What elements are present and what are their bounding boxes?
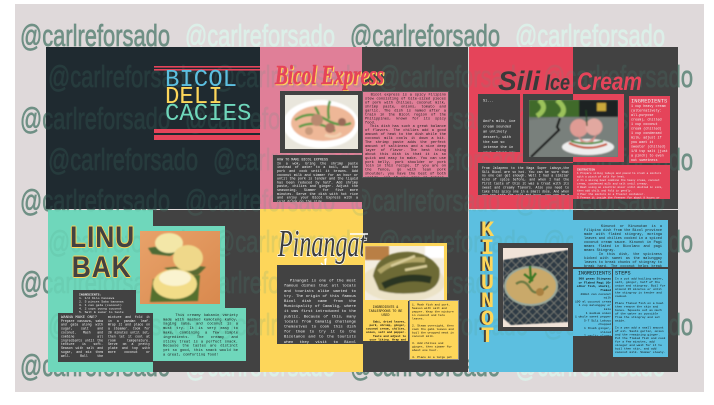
- faint watermark over panels: @carlreforsado: [378, 142, 528, 177]
- heading: Sili Ice Cream: [498, 66, 642, 96]
- steps box: kinunot: Place flaked fish on a bowl then remove the skin and bones. Squeeze out as much of the water as possible from the stingray and set aside.: [615, 302, 664, 322]
- ingredients box: kinunot: 1 cup malunggay or kale: [579, 304, 611, 311]
- ingredients box: linubak: 1. 1/2 Kilo Cassava: [79, 296, 114, 300]
- heading: Kinunot vertical: K: [481, 218, 494, 243]
- ingredients box: linubak: [73, 290, 136, 313]
- heading: Kinunot vertical: O: [481, 307, 494, 332]
- faint watermark over panels: @carlreforsado: [48, 307, 198, 342]
- steps box: pinangat: [409, 300, 459, 360]
- ingredients box: kinunot: 5-7 Sili Labuyo chopped: [584, 319, 611, 326]
- panel: linubak background: [48, 210, 153, 372]
- ingredients box: kinunot: 1 whole sweet pepper: [575, 315, 611, 319]
- text block: sili description: [478, 94, 520, 152]
- instructions box: sili ice cream: 2 In a mixing bowl combine the heavy cream, coconut cream, condensed milk and salt until creamy.: [577, 179, 660, 185]
- ingredients box: kinunot: 100 ml coconut cream: [575, 300, 611, 303]
- watermark layer: @carlreforsado: [350, 348, 500, 383]
- text block: pinangat description: [277, 265, 363, 344]
- ingredients box: sili ice cream: 1/8 tsp salt (just a pinch) to even out sweetness: [631, 149, 668, 162]
- ingredients box: kinunot: 1 medium onion: [586, 311, 611, 315]
- faint watermark over panels: @carlreforsado: [378, 224, 528, 259]
- ingredients box: linubak: 3. 1 can gata (coconut): [79, 304, 122, 307]
- panel: pinangat background: [260, 209, 363, 372]
- cover title: CACIES: [165, 101, 251, 128]
- heading: Kinunot vertical: U: [481, 271, 494, 296]
- steps box: kinunot: STEPS: [615, 270, 631, 276]
- steps box: pinangat: 1. Mash fish and pork. Season with salt and pepper. Wrap the mixture in coconut and taro leaves.: [412, 303, 454, 320]
- ingredients box: kinunot: 500 grams Stingray or Flaked Pagi (Or other fish, shark), flaked: [577, 277, 611, 292]
- heading: Kinunot vertical: N: [481, 253, 494, 278]
- ingredients box: kinunot: 1 thumb ginger, sliced: [584, 326, 611, 334]
- heading: Linubak: BAK: [72, 250, 132, 284]
- text block: kinunot description: Kinunot or Kinunutan is a Filipino dish from the Bicol province made with flaked stingray, moringa leaves and chilies cooked in a spiced coconut cream sauce. Kinunot in Pagi means flaked in Bicolano and pagi means Stingray.: [584, 224, 662, 252]
- cover decorative red lines: [154, 66, 260, 140]
- faint watermark over panels: @carlreforsado: [213, 59, 363, 94]
- ingredients box: pinangat: INGREDIENTS & TABLESPOONS TO BE USED: [369, 305, 402, 317]
- steps box: pinangat: 2. Steam overnight, then cook the gabi leaves and boil the wrapped meat in coconut milk.: [412, 324, 454, 338]
- ingredients box: linubak: INGREDIENTS:: [79, 293, 101, 296]
- steps box: pinangat: 3. Add chilies and ginger, then simmer for about one hour.: [412, 342, 452, 352]
- panel: linubak dark side: [153, 210, 260, 372]
- cover title: BICOL: [165, 67, 237, 94]
- panel: bicol express background: [260, 47, 362, 209]
- heading: Kinunot vertical: I: [481, 236, 494, 261]
- faint watermark over panels: @carlreforsado: [213, 142, 363, 177]
- ingredients box: kinunot: 400ml can coconut milk: [580, 292, 611, 300]
- ingredients box: linubak: 2. 5 pieces Saba bananas: [79, 300, 124, 304]
- instructions box: sili ice cream: 3 Beat using an electric mixer until doubled in size, then add chili and fold in gently.: [577, 186, 663, 192]
- heading: Sili Ice Cream: Ice: [545, 70, 570, 95]
- watermark layer: @carlreforsado: [20, 348, 170, 383]
- heading: Linubak: LINU: [70, 220, 135, 254]
- faint watermark over panels: @carlreforsado: [185, 265, 335, 300]
- heading: Kinunot vertical: [480, 218, 494, 349]
- text block: bicol express intro: Bicol express is a spicy Filipino stew consisting of bite-sized pieces of pork with chilies, coconut milk, shrimp paste, onions, tomato and garlic. The dish is named after a train in the Bicol region of the Philippines, known for its spicy food.: [365, 93, 446, 124]
- faint watermark over panels: @carlreforsado: [48, 142, 198, 177]
- photo: bicol express dish: [285, 95, 358, 149]
- faint watermark over panels: @carlreforsado: [350, 183, 500, 218]
- faint watermark over panels: @carlreforsado: [48, 224, 198, 259]
- watermark layer: @carlreforsado: [350, 18, 500, 53]
- watermark layer: @carlreforsado: [185, 348, 335, 383]
- ingredients box: sili ice cream: 1 cup heavy cream (alternatively: all-purpose cream), chilled: [631, 104, 666, 122]
- faint watermark over panels: @carlreforsado: [350, 265, 500, 300]
- ingredients box: sili ice cream: [629, 96, 670, 163]
- ingredients box: kinunot: [573, 269, 612, 336]
- panel: kinunot background: [469, 210, 573, 372]
- cover title: [165, 67, 251, 128]
- watermark layer: @carlreforsado: [185, 18, 335, 53]
- steps box: kinunot: In a pan add a small amount of oil. Sauté garlic, onion and the remaining ginger. Put the flaked fish and cook for a few minutes, add vinegar and wait for it to boil then stir, and add coconut milk. Simmer slowly.: [615, 326, 665, 354]
- faint watermark over panels: @carlreforsado: [378, 307, 528, 342]
- faint watermark over panels: @carlreforsado: [213, 307, 363, 342]
- text block: bicol express recipe: HOW TO MAKE BICOL EXPRESS: [277, 158, 328, 162]
- cover title: DELI: [165, 84, 223, 111]
- steps box: kinunot: [613, 269, 668, 357]
- ingredients box: linubak: 4. 2 cups young coconut: [79, 307, 122, 310]
- steps box: kinunot: In a pot add boiling water, salt, ginger, half of the onion and stingray. Boil for around 15 minutes or until the stingray is tender and cooked.: [615, 277, 665, 298]
- panel: sili ice cream background: [469, 47, 573, 209]
- faint watermark over panels: @carlreforsado: [213, 224, 363, 259]
- photo: pinangat dish: [365, 246, 444, 300]
- instructions box: sili ice cream: [573, 165, 670, 199]
- watermark layer: @carlreforsado: [20, 265, 170, 300]
- faint watermark over panels: @carlreforsado: [350, 101, 500, 136]
- faint watermark over panels: @carlreforsado: [48, 59, 198, 94]
- photo frame: kinunot: [498, 243, 573, 331]
- faint watermark over panels: @carlreforsado: [185, 101, 335, 136]
- photo: kinunot dish: [503, 248, 568, 327]
- ingredients box: sili ice cream: 1 cup coconut cream (chilled): [631, 122, 662, 130]
- text block: linubak how to make: WANNA MAKE ONE?: [61, 314, 97, 319]
- faint watermark over panels: @carlreforsado: [378, 59, 528, 94]
- ingredients box: pinangat: [363, 300, 408, 341]
- ingredients box: sili ice cream: 1 cup condensed milk, adjust if you want it sweeter (chilled): [631, 131, 666, 148]
- heading: Linubak: [70, 220, 135, 284]
- photo frame: pinangat: [363, 243, 447, 301]
- text block: kinunot description: [573, 220, 668, 267]
- photo frame: bicol express: [280, 91, 362, 153]
- heading: Kinunot vertical: T: [481, 324, 494, 349]
- instructions box: sili ice cream: INSTRUCTION: [577, 168, 595, 171]
- photo: linubak cakes: [140, 231, 220, 304]
- faint watermark over panels: [46, 59, 678, 342]
- heading: Kinunot vertical: N: [481, 289, 494, 314]
- faint watermark over panels: @carlreforsado: [185, 183, 335, 218]
- ingredients box: kinunot: INGREDIENTS: [578, 270, 611, 276]
- panel: cover background: [46, 47, 260, 209]
- watermark layer: @carlreforsado: [20, 18, 170, 53]
- photo: sili ice cream: [529, 100, 618, 157]
- text block: bicol express intro: [362, 91, 449, 178]
- panel: pinangat dark side: [363, 209, 468, 372]
- photo frame: sili ice cream right: [573, 94, 624, 162]
- panel: sili ice cream dark side: [573, 47, 678, 209]
- instructions box: sili ice cream: 4 Pour the mixture in a freezer container.: [577, 193, 645, 196]
- linubak teal extensions: [153, 226, 246, 361]
- ingredients box: sili ice cream: INGREDIENTS: [631, 98, 667, 104]
- watermark layer: @carlreforsado: [20, 183, 170, 218]
- watermark layer: @carlreforsado: [20, 101, 170, 136]
- photo frame: sili ice cream left: [523, 94, 573, 162]
- instructions box: sili ice cream: 1 Prepare siling labuyo and pound to crush a mixture with a pinch of salt for heat.: [577, 172, 661, 178]
- panel: kinunot dark side: [573, 210, 678, 372]
- text block: linubak description: This creamy kakanin variety made with mashed kamoteng kahoy, saging saba, and coconut is a must try. It is very easy to make, combining a few simple ingredients. The creamy and sticky treat is a perfect snack. Because the tastes are distinct yet so good, this snack would be a great, comforting food!: [163, 313, 238, 356]
- panel: bicol express dark side: [362, 47, 468, 209]
- heading: Sili Ice Cream: Sili: [498, 66, 541, 96]
- text block: sili description: Si...: [483, 98, 494, 102]
